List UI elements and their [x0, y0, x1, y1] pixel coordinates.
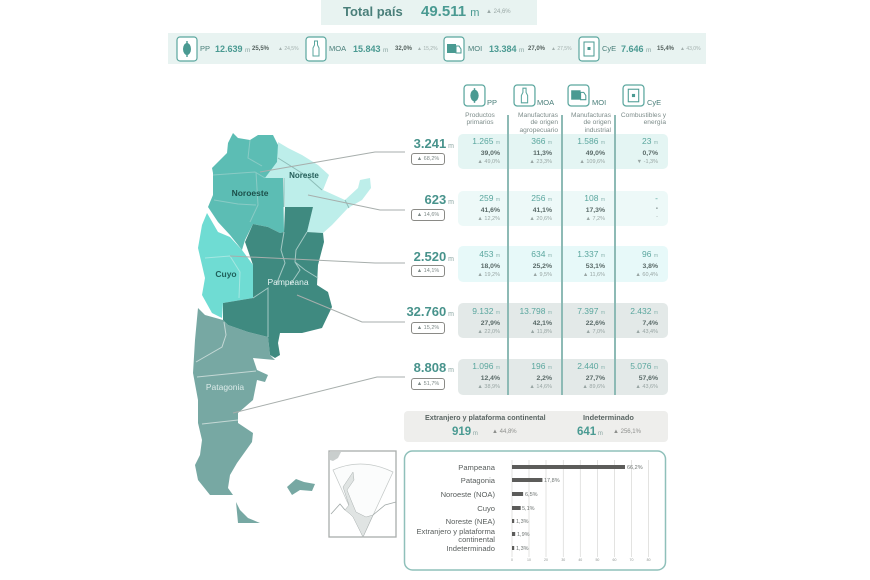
icon: bottle	[305, 36, 327, 62]
row: Pampeana	[406, 304, 658, 335]
value: indeterminado: 641 m	[577, 426, 603, 438]
total: 623 m	[425, 192, 454, 207]
column header: MOA	[513, 84, 558, 134]
row background: Patagonia	[458, 359, 668, 395]
column header: PP	[463, 84, 497, 126]
band: PP: ▲ 24,5%	[278, 46, 299, 52]
row: Cuyo: 53,1%	[586, 262, 605, 270]
row: Patagonia: 2.440 m	[577, 361, 605, 371]
variation badge	[411, 209, 445, 221]
bar chart: share by region: 5,1%	[522, 506, 535, 512]
bar chart: share by region: Pampeana	[458, 463, 496, 472]
row: Cuyo: 3,8%	[642, 262, 658, 270]
sector summary band	[168, 33, 706, 64]
row backgrounds	[458, 134, 668, 395]
row: Noroeste: ▼ -1,3%	[637, 159, 658, 165]
column header: CyE: Combustibles y	[621, 112, 666, 119]
row: Cuyo: 453 m	[479, 249, 500, 259]
row: Patagonia	[411, 360, 658, 390]
region: Patagonia: Patagonia	[206, 382, 244, 392]
bar chart: share by region: 0	[511, 558, 513, 562]
row: Noroeste: ▲ 49,0%	[477, 159, 500, 165]
row: Noreste	[411, 192, 658, 222]
row: Noroeste: 11,3%	[533, 150, 552, 156]
region: Noreste	[265, 142, 371, 233]
inset map: Antarctic sector	[329, 451, 396, 537]
row: Cuyo	[411, 249, 658, 278]
value: extranjero: 919 m	[452, 426, 478, 438]
bar chart: share by region: 40	[578, 558, 582, 562]
column header: CyE: energía	[644, 119, 666, 126]
column header: MOI	[567, 84, 611, 134]
row: Noroeste: 1.586 m	[577, 136, 605, 146]
total país banner: Total país	[343, 4, 403, 19]
row: Pampeana: 7,4%	[642, 320, 658, 326]
variation badge	[411, 153, 445, 165]
variation: indeterminado: ▲ 256,1%	[613, 429, 641, 435]
bar chart: share by region: 20	[544, 558, 548, 562]
row: Noroeste: 366 m	[531, 136, 552, 146]
band: PP	[176, 36, 299, 62]
row: Pampeana: 2.432 m	[630, 306, 658, 316]
row: Patagonia: 196 m	[531, 361, 552, 371]
row: Noroeste: ▲ 23,3%	[529, 159, 552, 165]
total: 2.520 m	[414, 249, 454, 264]
bar chart: share by region: 10	[527, 558, 531, 562]
bar chart: share by region: 6,5%	[525, 492, 538, 498]
variation badge: ▲ 14,6%	[417, 212, 439, 218]
row: Pampeana: 42,1%	[533, 320, 552, 326]
row: Noroeste: ▲ 109,6%	[579, 159, 605, 165]
divider 1	[507, 115, 509, 395]
column header: CyE	[621, 84, 666, 126]
icon: truck	[567, 84, 590, 107]
variation badge: ▲ 15,2%	[417, 325, 439, 331]
row: Noroeste: 39,0%	[481, 150, 500, 156]
row: Cuyo: ▲ 60,4%	[635, 272, 658, 278]
row: Noreste: ▲ 12,2%	[477, 216, 500, 222]
row: Cuyo: ▲ 11,6%	[583, 272, 605, 278]
region: Patagonia	[193, 308, 315, 523]
row: Noreste: -	[656, 214, 658, 220]
row: Patagonia: 2,2%	[536, 374, 552, 382]
bar chart: share by region: Noreste (NEA)	[446, 517, 495, 526]
row: Pampeana: ▲ 11,8%	[530, 329, 552, 335]
column header: MOA: agropecuario	[520, 127, 558, 134]
bar chart: share by region: 1,3%	[516, 519, 529, 525]
bar chart: share by region: 50	[595, 558, 599, 562]
row: Noreste: 108 m	[584, 193, 605, 203]
bar chart: share by region: 60	[613, 558, 616, 562]
icon: energy	[578, 36, 600, 62]
column header: CyE: CyE	[647, 98, 661, 107]
row: Pampeana: 9.132 m	[472, 306, 500, 316]
band: CyE: CyE	[602, 44, 616, 53]
band: PP: 12.639 m	[215, 44, 250, 54]
variation badge	[411, 378, 445, 390]
band: MOI: MOI	[468, 44, 482, 53]
band: MOA	[305, 36, 438, 62]
row background: Noroeste	[458, 134, 668, 169]
row: Patagonia: ▲ 38,9%	[477, 384, 500, 390]
total: 3.241 m	[414, 136, 454, 151]
region: Cuyo	[198, 213, 253, 318]
variation badge	[411, 265, 445, 277]
bar chart: share by region: 66,2%	[627, 465, 643, 471]
icon: bottle	[513, 84, 536, 107]
total país banner: ▲ 24,6%	[486, 9, 511, 15]
column header: MOI: industrial	[585, 127, 611, 134]
row: Patagonia: 57,6%	[639, 374, 658, 382]
column header: MOA: de origen	[530, 119, 558, 126]
bar chart: share by region: continental	[458, 535, 495, 544]
region: Pampeana: Pampeana	[267, 277, 309, 287]
region: Cuyo: Cuyo	[215, 269, 237, 279]
leader lines	[230, 152, 405, 413]
row: Cuyo: 96 m	[642, 249, 658, 259]
label: extranjero: Extranjero y plataforma continental	[425, 412, 546, 422]
band: MOI: ▲ 27,5%	[551, 46, 572, 52]
bar chart: share by region: 1,3%	[516, 546, 529, 552]
bar chart: share by region: Extranjero y plataforma	[416, 527, 496, 536]
row: Noreste: ▲ 20,6%	[529, 216, 552, 222]
band: CyE	[578, 36, 701, 62]
row: Patagonia: 1.096 m	[472, 361, 500, 371]
row background: Pampeana	[458, 303, 668, 338]
icon: truck	[443, 36, 465, 62]
row: Cuyo: 634 m	[531, 249, 552, 259]
column header: PP: primarios	[466, 119, 494, 126]
bar chart: share by region: 30	[561, 558, 565, 562]
row: Noroeste	[411, 136, 658, 165]
row: Patagonia: ▲ 43,6%	[635, 384, 658, 390]
region: Noreste: Noreste	[289, 171, 319, 180]
bar chart: share by region: Patagonia	[461, 476, 496, 485]
band: PP: PP	[200, 44, 210, 53]
variation: extranjero: ▲ 44,8%	[492, 429, 517, 435]
row: Pampeana: ▲ 22,0%	[477, 329, 500, 335]
row: Noreste: 259 m	[479, 193, 500, 203]
band: CyE: 15,4%	[657, 46, 674, 52]
region: Noroeste: Noroeste	[232, 188, 269, 198]
row: Pampeana: 22,6%	[586, 320, 605, 326]
column header: MOA: Manufacturas	[518, 112, 558, 119]
row: Pampeana: 13.798 m	[519, 306, 552, 316]
row: Noroeste: 0,7%	[642, 150, 658, 156]
divider 3	[614, 115, 616, 395]
bar chart: share by region	[404, 450, 666, 571]
total: 32.760 m	[406, 304, 454, 319]
column header: MOA: MOA	[537, 98, 554, 107]
bar chart: share by region: Noroeste (NOA)	[441, 490, 495, 499]
label: indeterminado: Indeterminado	[583, 413, 634, 422]
column header: MOI: de origen	[584, 119, 611, 126]
bar chart: share by region: 17,8%	[544, 478, 560, 484]
band: MOI: 27,0%	[528, 46, 545, 52]
row: Noreste: -	[656, 204, 658, 212]
column header: MOI: MOI	[592, 98, 606, 107]
icon: energy	[622, 84, 645, 107]
row: Noreste: 41,6%	[481, 206, 500, 214]
divider 2	[561, 115, 563, 395]
row: Noreste: -	[655, 193, 658, 203]
bar chart: share by region: 80	[647, 558, 651, 562]
column header: PP: Productos	[465, 112, 495, 119]
panel: extranjero e indeterminado	[404, 411, 668, 442]
row: Pampeana: 7.397 m	[577, 306, 605, 316]
band: PP: 25,5%	[252, 46, 269, 52]
band: MOI: 13.384 m	[489, 44, 524, 54]
row: Noreste: 17,3%	[586, 206, 605, 214]
band: CyE: ▲ 43,0%	[680, 46, 701, 52]
variation badge: ▲ 51,7%	[417, 381, 439, 387]
row: Pampeana: 27,9%	[481, 320, 500, 326]
variation badge: ▲ 14,1%	[417, 268, 439, 274]
row: Noreste: 256 m	[531, 193, 552, 203]
row: Patagonia: 27,7%	[586, 374, 605, 382]
icon: wheat	[463, 84, 486, 107]
bar chart: share by region: Cuyo	[477, 504, 495, 513]
bar chart: share by region: Indeterminado	[446, 544, 495, 553]
icon: wheat	[176, 36, 198, 62]
region: Pampeana	[223, 207, 332, 358]
row: Cuyo: 25,2%	[533, 262, 552, 270]
column header: PP: PP	[487, 98, 497, 107]
row: Patagonia: 12,4%	[481, 374, 500, 382]
total: 8.808 m	[414, 360, 454, 375]
row: Patagonia: ▲ 14,6%	[529, 384, 552, 390]
band: MOA: ▲ 15,2%	[417, 46, 438, 52]
bar chart: share by region: 1,9%	[517, 532, 530, 538]
row: Cuyo: ▲ 19,2%	[477, 272, 500, 278]
row background: Cuyo	[458, 246, 668, 282]
row: Patagonia: ▲ 89,6%	[582, 384, 605, 390]
row: Pampeana: ▲ 43,4%	[635, 329, 658, 335]
row: Noreste: 41,1%	[533, 206, 552, 214]
row: Noroeste: 23 m	[642, 136, 658, 146]
row: Pampeana: ▲ 7,0%	[585, 329, 605, 335]
row: Noroeste: 1.265 m	[472, 136, 500, 146]
variation badge	[411, 322, 445, 334]
band: MOI	[443, 36, 572, 62]
variation badge: ▲ 68,2%	[417, 156, 439, 162]
bar chart: share by region: 70	[630, 558, 633, 562]
region: Noroeste	[208, 133, 284, 250]
row: Cuyo: 18,0%	[481, 262, 500, 270]
column header: MOI: Manufacturas	[571, 112, 611, 119]
row: Cuyo: 1.337 m	[577, 249, 605, 259]
row: Noroeste: 49,0%	[586, 150, 605, 156]
total país banner: 49.511 m	[421, 3, 479, 20]
total país banner	[321, 0, 537, 25]
band: MOA: 15.843 m	[353, 44, 388, 54]
row: Noreste: ▲ 7,2%	[585, 216, 605, 222]
row: Patagonia: 5.076 m	[630, 361, 658, 371]
band: CyE: 7.646 m	[621, 44, 651, 54]
band: MOA: 32,0%	[395, 46, 412, 52]
band: MOA: MOA	[329, 44, 346, 53]
row background: Noreste	[458, 191, 668, 226]
row: Cuyo: ▲ 9,5%	[532, 272, 552, 278]
